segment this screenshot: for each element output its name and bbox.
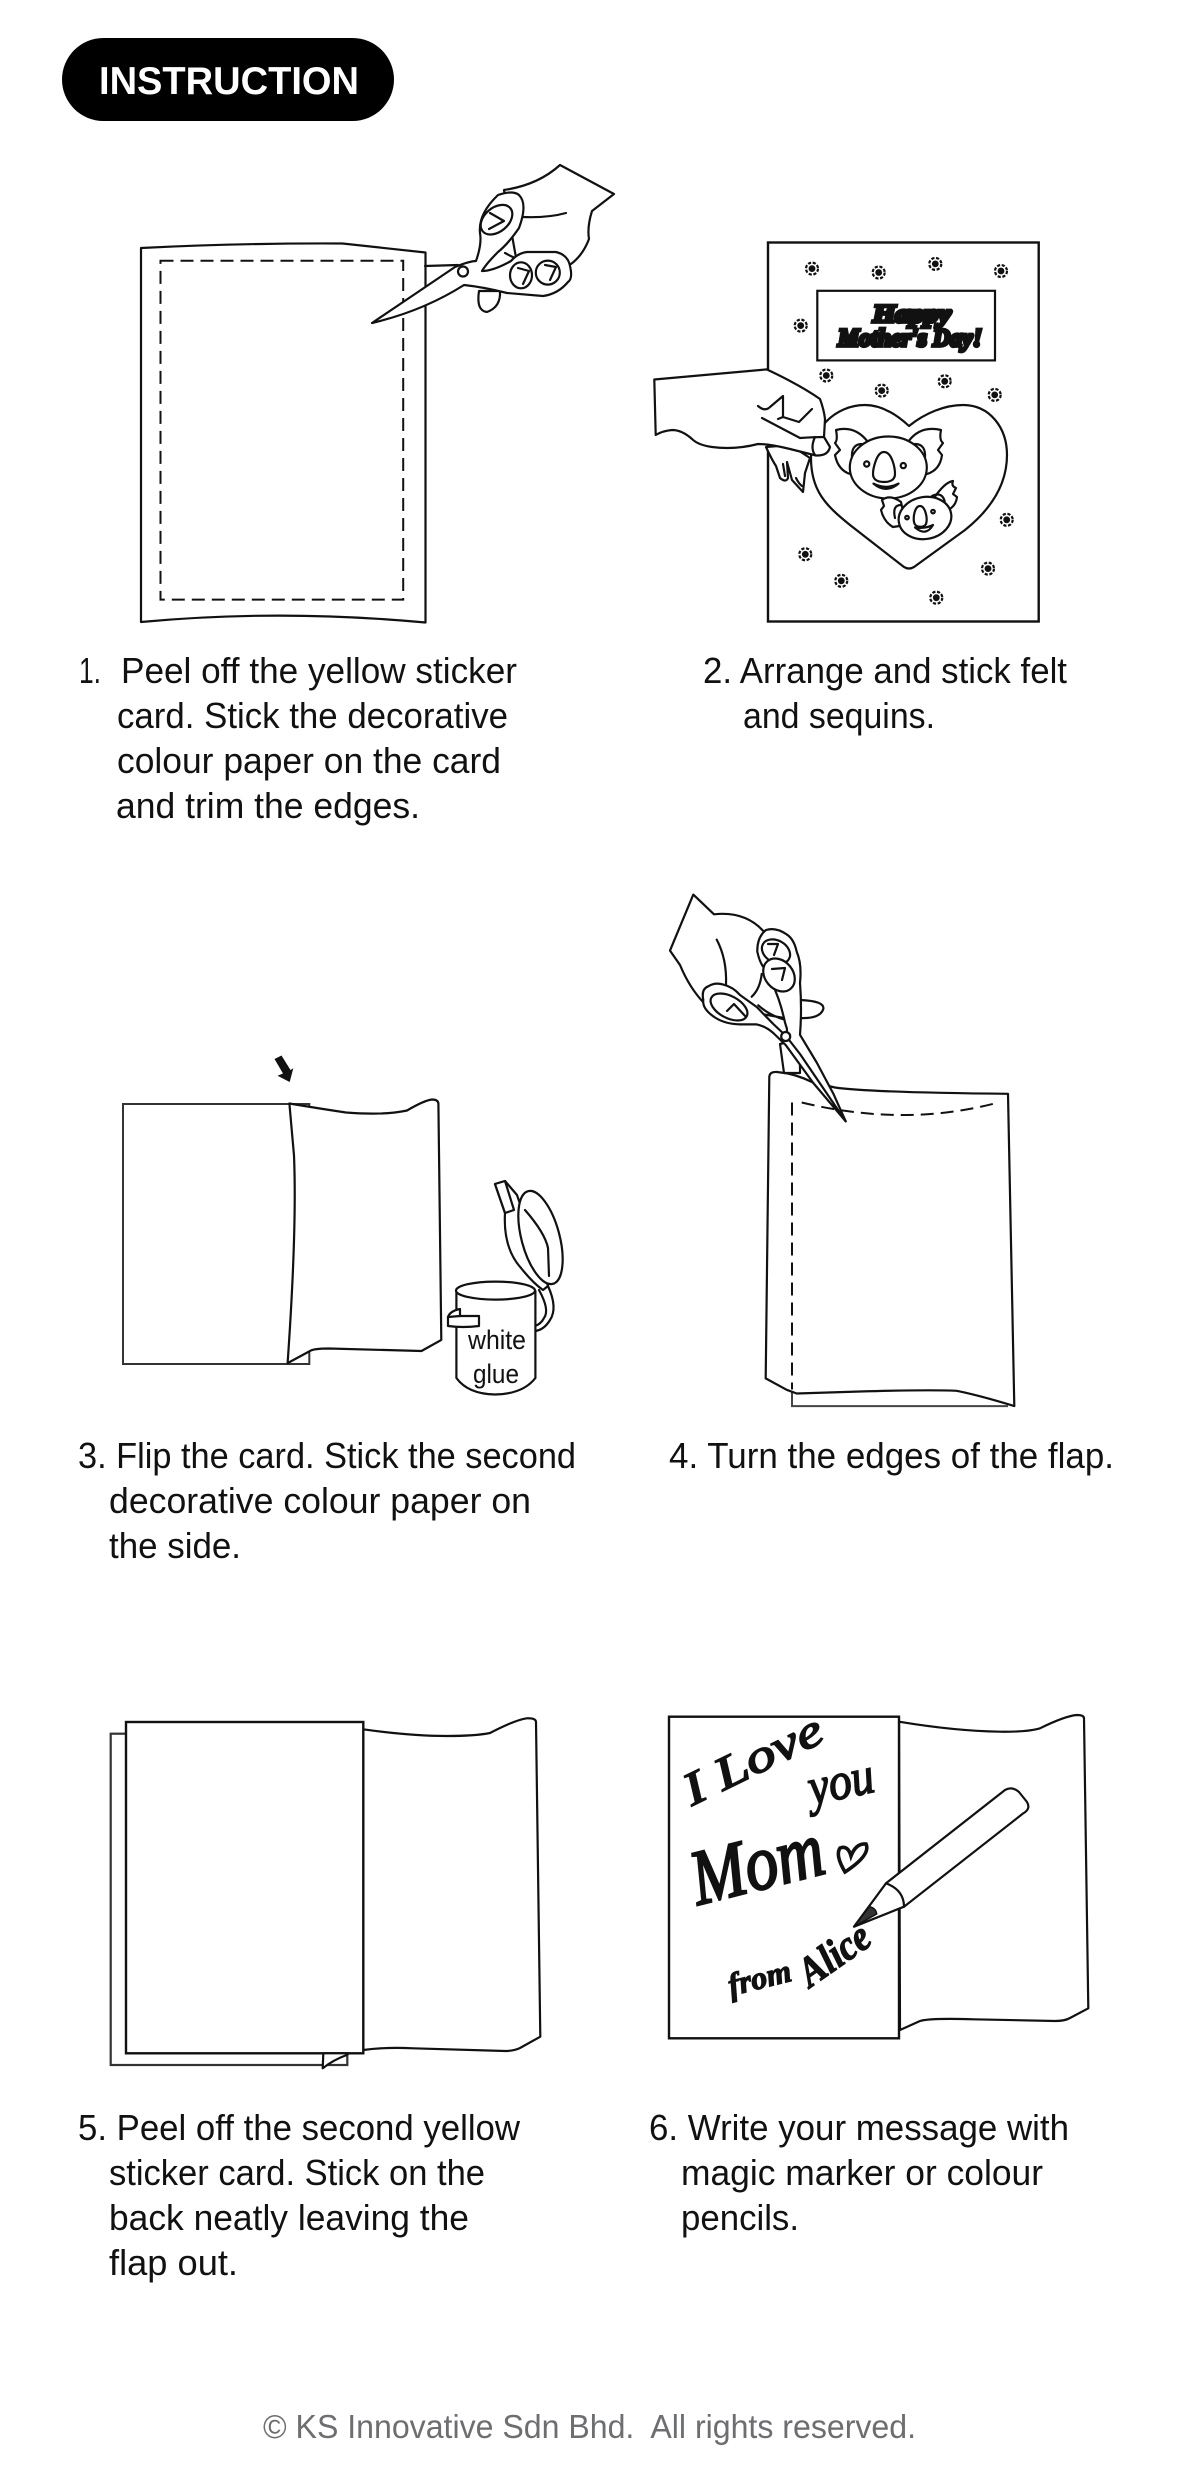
text: step 4 caption: 4. Turn the edges of the flap. [669, 1435, 1114, 1476]
label: happy mother's day: Mother's Day! [837, 325, 982, 352]
illustration: card back [123, 1104, 309, 1364]
panel: step 5 [78, 1718, 540, 2283]
text: step 3 caption [78, 1435, 576, 1566]
text: step 5 caption [78, 2107, 521, 2283]
illustration: card with message: Alice [787, 1914, 880, 1998]
text: step 1 caption: colour paper on the card [117, 740, 501, 781]
text: step 1 caption [79, 650, 517, 826]
text: step 1 caption: 1. [79, 650, 101, 691]
illustration: paper with dashed trim line [141, 243, 426, 623]
panel: step 4 [669, 895, 1114, 1476]
panel: step 3 [78, 1056, 576, 1566]
sequins [795, 258, 1013, 604]
illustration: front card [126, 1722, 363, 2053]
illustration: flap [363, 1718, 540, 2051]
illustration: peeled corner [323, 2053, 349, 2068]
text: step 3 caption: 3. Flip the card. Stick the second [78, 1435, 576, 1476]
illustration: flap [899, 1715, 1088, 2030]
icon: white glue bottle: white [467, 1325, 526, 1355]
text: step 1 caption: card. Stick the decorative [117, 695, 508, 736]
icon: white glue bottle: glue [473, 1359, 519, 1389]
text: step 5 caption: 5. Peel off the second yellow [78, 2107, 521, 2148]
text: step 5 caption: back neatly leaving the [109, 2197, 469, 2238]
icon: hand with scissors cutting [372, 165, 614, 323]
label: happy mother's day [817, 291, 995, 360]
illustration: folded flap with dashed line [766, 1072, 1014, 1406]
text: step 2 caption: 2. Arrange and stick felt [703, 650, 1067, 691]
icon: large koala [835, 429, 943, 498]
panel: step 6 [649, 1703, 1088, 2238]
icon: hand with scissors [670, 895, 846, 1121]
text: step 6 caption: 6. Write your message with [649, 2107, 1069, 2148]
icon: hand placing felt [654, 369, 830, 492]
illustration: card with message: Mom [680, 1805, 832, 1922]
illustration: back sheet [111, 1734, 347, 2065]
title: instruction pill [62, 38, 394, 121]
text: step 6 caption: magic marker or colour [681, 2152, 1043, 2193]
text: step 1 caption: Peel off the yellow sticker [121, 650, 517, 691]
footer: copyright: © KS Innovative Sdn Bhd. All rights reserved. [263, 2408, 916, 2445]
text: step 2 caption: and sequins. [743, 695, 935, 736]
panel: step 2 [654, 242, 1067, 736]
text: step 2 caption [703, 650, 1067, 736]
text: step 6 caption: pencils. [681, 2197, 799, 2238]
illustration: decorative flap [288, 1100, 441, 1363]
text: step 5 caption: sticker card. Stick on the [109, 2152, 485, 2193]
illustration: card with message: from [724, 1952, 795, 2003]
illustration: card with message: I Love [673, 1703, 831, 1816]
text: step 6 caption [649, 2107, 1069, 2238]
illustration: card with message: you [798, 1747, 879, 1818]
text: step 5 caption: flap out. [109, 2242, 238, 2283]
illustration: decorated greeting card [768, 242, 1039, 622]
heart [811, 405, 1007, 568]
label: happy mother's day: Happy [872, 301, 952, 328]
arrow: pointing at fold [274, 1056, 293, 1082]
icon: white glue bottle [448, 1181, 571, 1394]
illustration: card with message [669, 1703, 899, 2038]
icon: pencil [854, 1788, 1028, 1927]
icon: small koala [881, 481, 957, 543]
text: step 1 caption: and trim the edges. [116, 785, 420, 826]
text: step 3 caption: the side. [109, 1525, 241, 1566]
title: instruction pill: INSTRUCTION [99, 60, 359, 103]
text: step 3 caption: decorative colour paper on [109, 1480, 531, 1521]
panel: step 1 [79, 165, 614, 826]
